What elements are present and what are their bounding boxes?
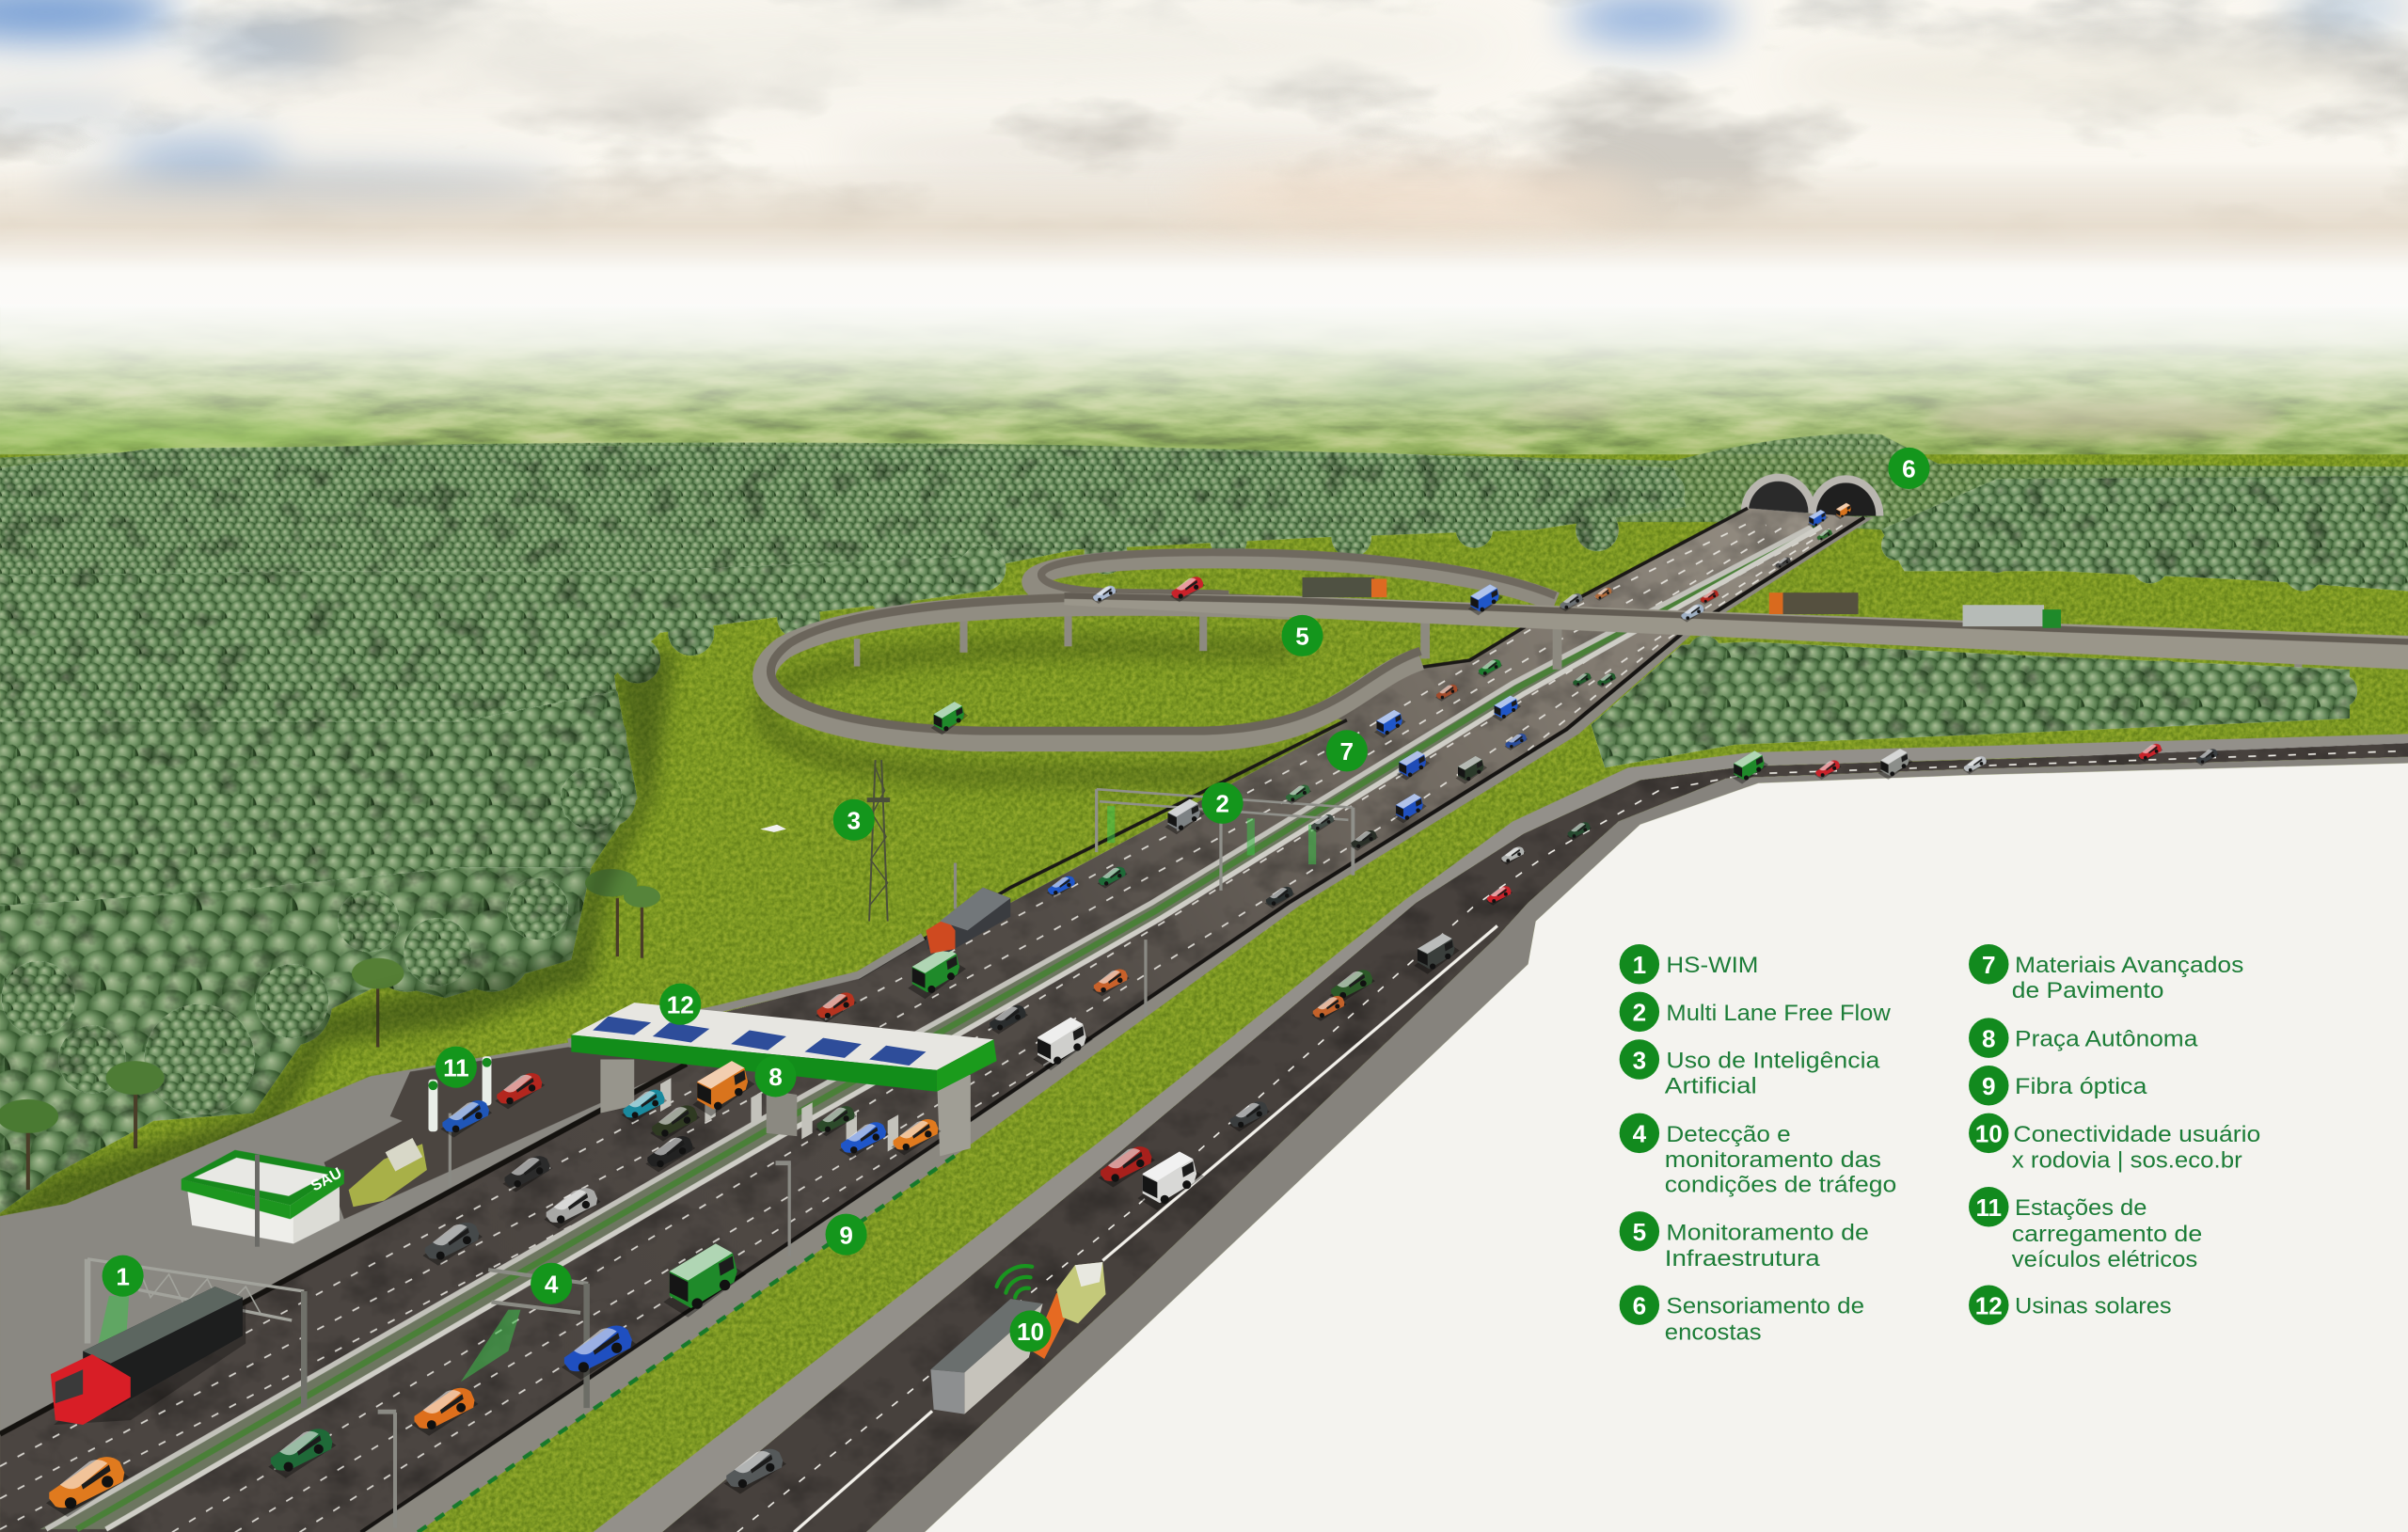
map marker 11 [436,1047,477,1088]
map marker 3: 3 [847,807,861,835]
fiber optic line [418,1150,963,1532]
legend white panel [925,763,2408,1532]
legend item 7: de Pavimento [2012,978,2163,1003]
communication tower [867,760,889,922]
grass strip between highways [418,633,2304,1532]
legend item 10: x rodovia | sos.eco.br [2012,1148,2242,1174]
legend item 6: 6 [1633,1291,1646,1319]
service truck at SAU [349,1138,427,1207]
legend item 5: Monitoramento de [1666,1220,1869,1245]
flyover piers [849,604,2302,735]
legend item 7 [1969,944,2243,1003]
charging stations [429,1056,491,1131]
legend item 10: Conectividade usuário [2013,1122,2260,1147]
map marker 5: 5 [1295,623,1309,651]
tree band beyond secondary road [1591,636,2357,767]
legend item 4 [1620,1113,1896,1198]
map marker 7 [1326,730,1368,771]
map marker 6 [1888,448,1929,489]
forest shadow on grass [0,645,675,1236]
foreground tree crowns [2,767,622,1114]
grass lawn [0,454,2408,1532]
map marker 1 [103,1256,144,1297]
forest: upper middle trees [0,545,1006,760]
legend item 11: 11 [1975,1193,2002,1222]
legend item 3: Uso de Inteligência [1666,1048,1880,1073]
wifi icon [997,1266,1032,1298]
toll plaza canopy with solar panels [571,1003,997,1156]
legend item 8 [1969,1018,2198,1058]
upper highway edge rail [859,508,1748,978]
secondary road concrete strip [593,734,2408,1532]
flyover shadow on lawn [764,647,1420,775]
main highway asphalt [0,508,1864,1532]
legend item 8: 8 [1982,1024,1996,1052]
legend item 4: 4 [1633,1120,1647,1148]
legend item 7: 7 [1982,951,1996,979]
map marker 9: 9 [839,1221,853,1249]
legend item 11: veículos elétricos [2012,1247,2197,1272]
legend item 2: 2 [1633,999,1646,1027]
trailer truck on secondary road [930,1262,1106,1414]
legend item 5: Infraestrutura [1665,1246,1820,1271]
palm trees [0,869,660,1190]
legend item 9: Fibra óptica [2015,1074,2147,1099]
road edge barrier [0,1064,687,1434]
drone [760,825,786,832]
forest: right upper trees [1881,476,2408,592]
legend item 10 [1969,1113,2260,1174]
map marker 9 [826,1214,867,1256]
light poles [378,863,1148,1527]
legend item 1: 1 [1633,951,1646,979]
legend item 4: monitoramento das [1665,1147,1881,1173]
legend item 12: 12 [1975,1291,2003,1319]
legend item 9: 9 [1982,1072,1996,1100]
secondary road markings [737,750,2408,1532]
legend item 10: 10 [1975,1120,2003,1148]
toll booths [660,1078,898,1151]
sensor beams [98,806,1316,1382]
charging and toll parking area [324,1047,687,1219]
legend item 7: Materiais Avançados [2015,953,2243,978]
map marker 10 [1009,1310,1052,1351]
map marker 5 [1281,615,1323,656]
flyover trucks [1302,577,2061,628]
gantry 2 [1097,789,1353,891]
legend item 3: 3 [1633,1046,1646,1074]
central median with green strip [40,527,1821,1529]
SAU service building [182,1150,344,1247]
secondary road [662,743,2408,1532]
legend item 12 [1969,1285,2172,1325]
legend item 11: Estações de [2015,1195,2147,1221]
forest: near trees [0,867,592,1213]
legend item 6: encostas [1665,1319,1762,1345]
map marker 2: 2 [1215,790,1229,818]
legend item 3 [1620,1039,1880,1098]
legend item 3: Artificial [1665,1073,1757,1098]
legend item 4: Detecção e [1666,1122,1791,1147]
legend item 1: HS-WIM [1666,953,1758,978]
map marker 11: 11 [443,1053,469,1082]
vehicles: cars and vans [46,503,2219,1517]
highway lane dashes [0,522,1843,1532]
sky with clouds [0,0,2408,315]
legend item 9 [1969,1066,2147,1105]
legend item 11 [1969,1187,2202,1272]
map marker 8: 8 [768,1063,783,1091]
distant fields [0,304,2408,476]
map marker 2 [1202,782,1244,824]
road shoulder with rail [361,517,1874,1532]
flyover loop upper [1032,552,1556,602]
map marker 1: 1 [116,1262,130,1290]
green hill over tunnel [0,434,2408,529]
flyover main deck and loop [764,592,2408,740]
forest: middle trees [0,691,638,937]
legend item 5: 5 [1633,1218,1646,1246]
map marker 10: 10 [1017,1318,1044,1346]
SAU service building: SAU [309,1164,344,1194]
truck: orange dump on highway [926,888,1010,954]
map marker 4 [531,1263,572,1304]
map marker 6: 6 [1902,455,1916,483]
truck: HS-WIM red truck [51,1287,246,1425]
map marker 7: 7 [1340,737,1354,766]
gantry 1 [87,1259,304,1408]
legend item 2: Multi Lane Free Flow [1666,1001,1891,1026]
legend item 6 [1620,1285,1864,1345]
legend item 4: condições de tráfego [1665,1173,1896,1198]
forest: far trees [0,445,1687,675]
legend item 5 [1620,1211,1869,1271]
legend item 11: carregamento de [2012,1222,2202,1247]
map marker 3 [833,799,875,841]
service pavement [0,1009,768,1435]
map marker 8 [754,1055,797,1097]
gantry 4 [488,1270,588,1408]
legend item 6: Sensoriamento de [1666,1294,1864,1319]
map marker 4: 4 [545,1271,559,1299]
legend item 12: Usinas solares [2015,1294,2172,1319]
curb beside parking [568,937,923,1043]
legend item 1 [1620,944,1758,984]
map marker 12: 12 [667,991,694,1019]
tunnels [1741,476,1883,516]
curb by white panel [866,757,2408,1532]
legend [1620,944,2260,1345]
legend item 8: Praça Autônoma [2015,1027,2198,1052]
legend item 2 [1620,992,1891,1032]
map marker 12 [659,984,701,1025]
